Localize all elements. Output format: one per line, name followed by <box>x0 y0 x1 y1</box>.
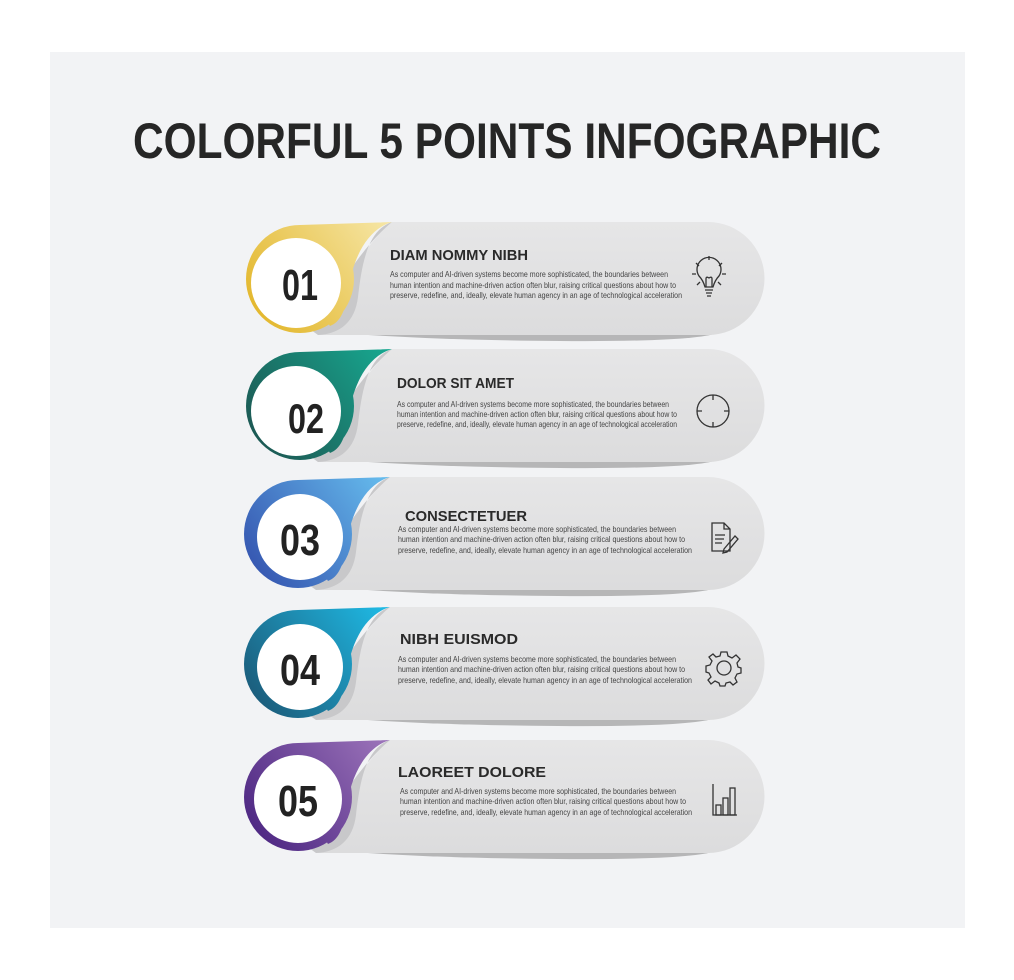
body text: preserve, redefine, and, ideally, elevate human agency in an age of technological acceleration <box>398 675 692 685</box>
row 1: 01 <box>282 261 318 310</box>
heading: DIAM NOMMY NIBH <box>390 247 528 264</box>
body text <box>398 524 692 555</box>
body text <box>390 269 682 300</box>
row 2 <box>246 349 764 468</box>
grey pill <box>316 740 764 853</box>
icon: target <box>697 395 729 427</box>
crescent shadow <box>298 740 390 853</box>
colored teardrop <box>244 607 390 718</box>
body text: As computer and AI-driven systems become more sophisticated, the boundaries between <box>390 269 668 279</box>
row 4: 04 <box>280 646 320 695</box>
icon: bar chart <box>713 784 737 815</box>
shadow <box>330 459 720 468</box>
body text: human intention and machine-driven action often blur, raising critical questions about how to <box>398 664 685 674</box>
body text: As computer and AI-driven systems become more sophisticated, the boundaries between <box>400 786 676 796</box>
heading: LAOREET DOLORE <box>398 764 546 781</box>
grey pill <box>318 349 764 462</box>
row 4 <box>244 607 764 726</box>
body text: human intention and machine-driven action often blur, raising critical questions about how to <box>397 409 677 419</box>
body text: human intention and machine-driven action often blur, raising critical questions about how to <box>400 796 686 806</box>
body text: As computer and AI-driven systems become more sophisticated, the boundaries between <box>398 524 676 534</box>
body text <box>397 399 677 429</box>
crescent shadow <box>300 349 392 462</box>
colored teardrop <box>244 740 390 851</box>
shadow <box>328 850 718 859</box>
body text: preserve, redefine, and, ideally, elevate human agency in an age of technological acceleration <box>398 545 692 555</box>
crescent shadow <box>298 477 390 590</box>
heading: DOLOR SIT AMET <box>397 375 514 392</box>
icon: gear <box>706 652 741 686</box>
row 5: 05 <box>278 777 318 826</box>
body text <box>400 786 692 817</box>
body text: human intention and machine-driven action often blur, raising critical questions about how to <box>390 280 676 290</box>
crescent shadow <box>300 222 392 335</box>
crescent shadow <box>298 607 390 720</box>
heading: CONSECTETUER <box>405 508 527 525</box>
body text <box>398 654 692 685</box>
number circle <box>254 755 342 843</box>
number circle <box>257 494 343 580</box>
colored teardrop <box>246 349 392 460</box>
shadow <box>328 717 718 726</box>
number circle <box>257 624 343 710</box>
grey pill <box>316 607 764 720</box>
colored teardrop <box>244 477 390 588</box>
body text: As computer and AI-driven systems become more sophisticated, the boundaries between <box>397 399 669 409</box>
number circle <box>251 366 341 456</box>
row 1 <box>246 222 764 341</box>
row 2: 02 <box>288 395 324 442</box>
row 3: 03 <box>280 516 320 565</box>
title: COLORFUL 5 POINTS INFOGRAPHIC <box>133 113 881 169</box>
body text: preserve, redefine, and, ideally, elevate human agency in an age of technological acceleration <box>397 419 677 429</box>
row 5 <box>244 740 764 859</box>
shadow <box>330 332 720 341</box>
number circle <box>251 238 341 328</box>
icon: light bulb <box>692 256 726 296</box>
shadow <box>328 587 718 596</box>
body text: preserve, redefine, and, ideally, elevate human agency in an age of technological acceleration <box>390 290 682 300</box>
icon: document with pen <box>712 523 738 553</box>
colored teardrop <box>246 222 392 333</box>
grey pill <box>316 477 764 590</box>
body text: human intention and machine-driven action often blur, raising critical questions about how to <box>398 534 685 544</box>
heading: NIBH EUISMOD <box>400 631 518 648</box>
row 3 <box>244 477 764 596</box>
body text: As computer and AI-driven systems become more sophisticated, the boundaries between <box>398 654 676 664</box>
body text: preserve, redefine, and, ideally, elevate human agency in an age of technological acceleration <box>400 807 692 817</box>
grey pill <box>318 222 764 335</box>
